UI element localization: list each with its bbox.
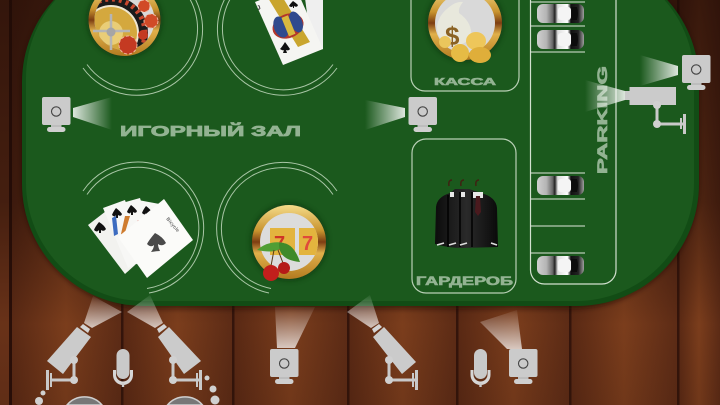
label: cloakroom: ГАРДЕРОБ	[416, 276, 513, 288]
icon: poker hand fan	[88, 198, 193, 278]
camera: bottom centre-left bullet	[127, 295, 202, 390]
camera: top right dome	[640, 55, 710, 90]
label: parking: PARKING	[594, 66, 610, 174]
camera: hall dome centre	[365, 97, 437, 132]
icon: money bag coin: $	[445, 21, 460, 51]
camera: bottom dome centre	[270, 307, 315, 384]
icon: microphone left	[113, 349, 133, 387]
camera: bottom left bullet	[46, 296, 122, 390]
icon: car 3	[537, 176, 584, 195]
icon: business suits	[435, 180, 498, 248]
icon: car 2	[537, 30, 584, 49]
table ring: poker	[83, 162, 204, 293]
table ring: blackjack	[217, 0, 337, 95]
icon: car 4	[537, 256, 584, 275]
icon: slot machine coin: 7	[274, 233, 285, 255]
table shadow	[22, 0, 699, 309]
icon: slot machine coin: 7	[302, 233, 313, 255]
camera: bottom centre bullet	[347, 295, 418, 390]
camera: bottom dome right	[480, 310, 538, 384]
icon: slot machine coin	[250, 203, 328, 281]
decorative dots and discs	[35, 376, 220, 405]
icon: poker hand fan: Bicycle	[164, 216, 180, 234]
table ring: roulette	[83, 0, 203, 95]
label: cashier: КАССА	[434, 76, 497, 88]
icon: microphone right	[470, 349, 490, 387]
icon: roulette wheel	[86, 0, 164, 59]
heading: gaming hall: ИГОРНЫЙ ЗАЛ	[120, 122, 301, 140]
panel: cashier	[411, 0, 519, 91]
camera: parking bullet	[585, 80, 686, 134]
table ring: slots	[217, 162, 337, 293]
icon: car 1	[537, 4, 584, 23]
panel: parking	[530, 0, 616, 284]
panel: cloakroom	[412, 139, 516, 293]
icon: playing cards jack of spades	[255, 0, 323, 65]
camera: hall dome left	[42, 97, 112, 132]
green gaming table	[22, 0, 699, 306]
icon: playing cards jack of spades: J	[257, 5, 262, 12]
